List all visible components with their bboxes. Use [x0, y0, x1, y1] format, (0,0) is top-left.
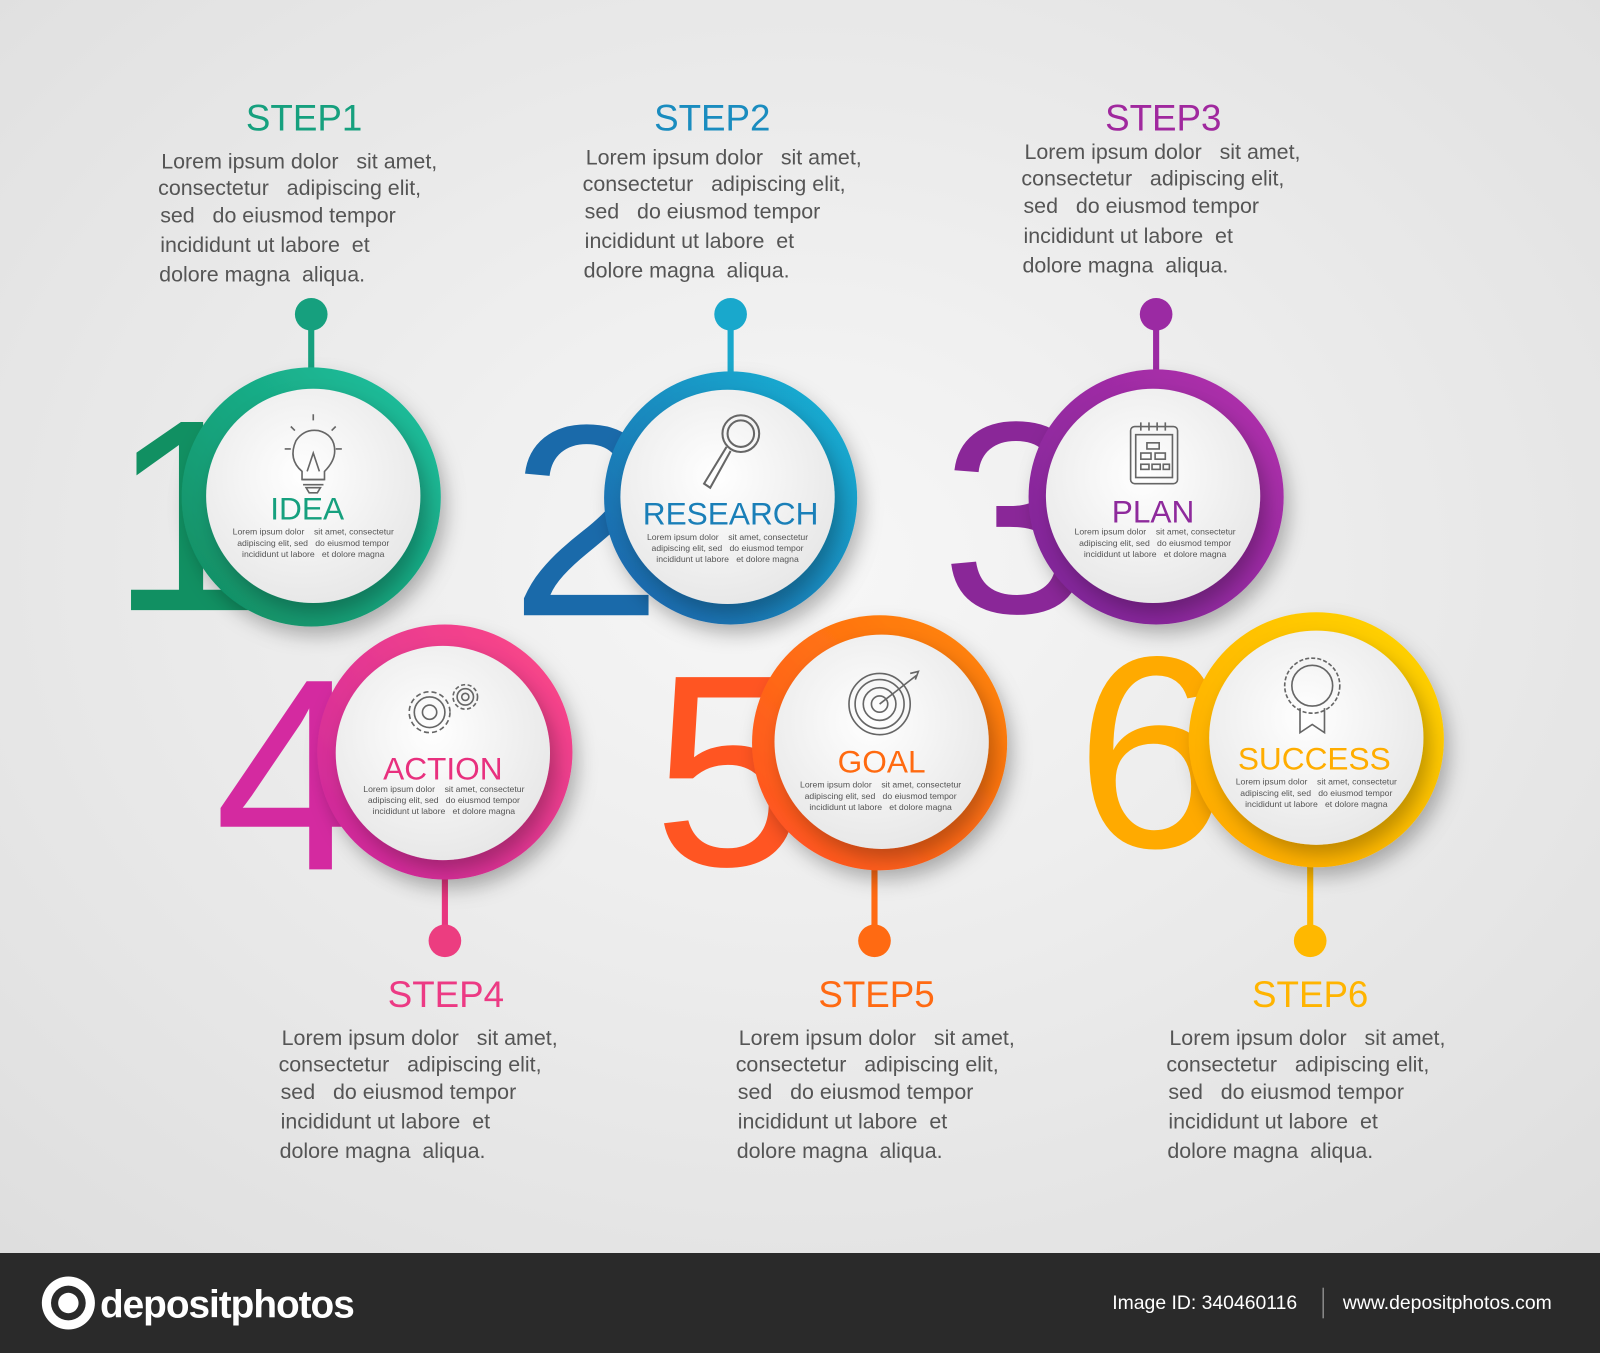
step 1 text: Lorem ipsum dolor sit amet,: [161, 149, 437, 173]
step 2 text: [583, 145, 862, 283]
step 5 text: incididunt ut labore et: [738, 1110, 947, 1134]
step 3 text: [1021, 140, 1301, 277]
icon: logo camera: [42, 1276, 95, 1330]
digit 4: 4: [214, 621, 366, 927]
step 4 text: dolore magna aliqua.: [280, 1139, 485, 1163]
digit 2: 2: [510, 367, 662, 673]
step 5 text: Lorem ipsum dolor sit amet,: [739, 1026, 1015, 1050]
pin 6: [1294, 847, 1327, 957]
image id: Image ID: 340460116: [1112, 1292, 1297, 1314]
digit 1: 1: [110, 362, 262, 668]
step 2 text: consectetur adipiscing elit,: [583, 172, 846, 196]
step 1 text: [158, 149, 437, 287]
circle 4: Lorem ipsum dolor sit amet, consectetur: [363, 784, 525, 794]
circle 1: [206, 389, 420, 603]
step 4 text: Lorem ipsum dolor sit amet,: [282, 1026, 558, 1050]
ring 6: [1189, 612, 1444, 867]
pin 5: [858, 852, 891, 957]
circle 6: [1209, 631, 1423, 845]
circle 2: [620, 390, 835, 604]
step 1 text: dolore magna aliqua.: [159, 263, 365, 287]
step 4 text: incididunt ut labore et: [281, 1110, 490, 1134]
footer bar: [0, 1253, 1600, 1353]
step 6 text: [1166, 1026, 1445, 1163]
step 3 text: sed do eiusmod tempor: [1023, 194, 1259, 218]
circle 1: adipiscing elit, sed do eiusmod tempor: [237, 538, 389, 548]
step 1 text: incididunt ut labore et: [160, 233, 370, 257]
circle 3: adipiscing elit, sed do eiusmod tempor: [1079, 538, 1231, 548]
step 2 text: Lorem ipsum dolor sit amet,: [586, 145, 862, 169]
step 2 text: incididunt ut labore et: [585, 229, 794, 253]
step 6 text: incididunt ut labore et: [1168, 1110, 1378, 1134]
step 5 text: [736, 1026, 1015, 1163]
circle 5: Lorem ipsum dolor sit amet, consectetur: [800, 780, 961, 790]
ring 3: [1029, 369, 1284, 624]
circle 1: incididunt ut labore et dolore magna: [242, 549, 385, 559]
step 1 text: consectetur adipiscing elit,: [158, 176, 421, 200]
step 3 text: Lorem ipsum dolor sit amet,: [1024, 140, 1301, 164]
digit 5: 5: [653, 617, 805, 923]
step 3 block: [941, 98, 1301, 670]
step 5 text: consectetur adipiscing elit,: [736, 1052, 999, 1076]
step 1 heading: STEP1: [246, 98, 362, 139]
circle 2: incididunt ut labore et dolore magna: [656, 554, 799, 564]
circle 1: IDEA: [270, 490, 345, 526]
icon: bulb: [285, 414, 342, 493]
step 6 block: [1076, 599, 1445, 1163]
step 3 text: consectetur adipiscing elit,: [1021, 167, 1284, 191]
circle 5: adipiscing elit, sed do eiusmod tempor: [805, 791, 957, 801]
step 4 block: [214, 621, 572, 1163]
pin 3: [1140, 298, 1172, 375]
pin 1: [295, 298, 328, 375]
ring 4: [317, 624, 572, 880]
step 5 block: [653, 615, 1015, 1163]
pin 2: [714, 298, 747, 378]
circle 6: Lorem ipsum dolor sit amet, consectetur: [1236, 777, 1397, 787]
circle 4: [336, 646, 550, 860]
circle 4: ACTION: [383, 751, 503, 787]
pin 4: [429, 857, 461, 957]
circle 3: incididunt ut labore et dolore magna: [1084, 549, 1227, 559]
circle 3: Lorem ipsum dolor sit amet, consectetur: [1075, 527, 1236, 537]
step 6 text: Lorem ipsum dolor sit amet,: [1169, 1026, 1445, 1050]
icon: rosette: [1285, 658, 1340, 733]
ring 2: [604, 371, 857, 624]
step 4 text: [279, 1026, 558, 1163]
circle 6: SUCCESS: [1238, 740, 1391, 776]
step 6 text: sed do eiusmod tempor: [1168, 1080, 1404, 1104]
step 1 text: sed do eiusmod tempor: [160, 203, 396, 227]
circle 5: [774, 635, 989, 849]
step 2 heading: STEP2: [654, 98, 770, 139]
icon: magnifier: [704, 415, 759, 488]
step 4 text: consectetur adipiscing elit,: [279, 1052, 542, 1076]
circle 2: adipiscing elit, sed do eiusmod tempor: [652, 543, 804, 553]
step 5 text: dolore magna aliqua.: [737, 1139, 943, 1163]
step 5 heading: STEP5: [818, 974, 935, 1015]
step 6 text: dolore magna aliqua.: [1167, 1139, 1373, 1163]
circle 6: adipiscing elit, sed do eiusmod tempor: [1240, 788, 1392, 798]
step 5 text: sed do eiusmod tempor: [738, 1080, 973, 1104]
icon: gears: [409, 685, 478, 733]
ring 5: [752, 615, 1007, 870]
step 3 text: dolore magna aliqua.: [1022, 253, 1228, 277]
step 4 text: sed do eiusmod tempor: [281, 1080, 516, 1104]
circle 2: Lorem ipsum dolor sit amet, consectetur: [647, 532, 808, 542]
circle 3: [1046, 389, 1260, 603]
step 4 heading: STEP4: [388, 974, 504, 1015]
digit 3: 3: [941, 364, 1093, 670]
step 2 block: [510, 98, 862, 673]
circle 4: adipiscing elit, sed do eiusmod tempor: [368, 795, 520, 805]
circle 1: Lorem ipsum dolor sit amet, consectetur: [233, 527, 394, 537]
circle 6: incididunt ut labore et dolore magna: [1245, 799, 1388, 809]
step 2 text: sed do eiusmod tempor: [585, 199, 820, 223]
step 1 block: [110, 98, 441, 668]
step 6 text: consectetur adipiscing elit,: [1166, 1052, 1429, 1076]
step 6 heading: STEP6: [1252, 974, 1368, 1015]
icon: planner: [1131, 422, 1178, 484]
circle 3: PLAN: [1112, 493, 1194, 529]
circle 5: incididunt ut labore et dolore magna: [809, 802, 952, 812]
ring 1: [182, 367, 441, 627]
step 3 heading: STEP3: [1105, 98, 1221, 139]
step 3 text: incididunt ut labore et: [1023, 224, 1233, 248]
circle 2: RESEARCH: [643, 495, 818, 531]
logo text: depositphotos: [100, 1283, 354, 1326]
step 2 text: dolore magna aliqua.: [584, 259, 790, 283]
digit 6: 6: [1076, 599, 1228, 905]
website: www.depositphotos.com: [1342, 1292, 1552, 1314]
circle 4: incididunt ut labore et dolore magna: [373, 806, 515, 816]
icon: target: [849, 671, 918, 735]
circle 5: GOAL: [838, 743, 926, 779]
